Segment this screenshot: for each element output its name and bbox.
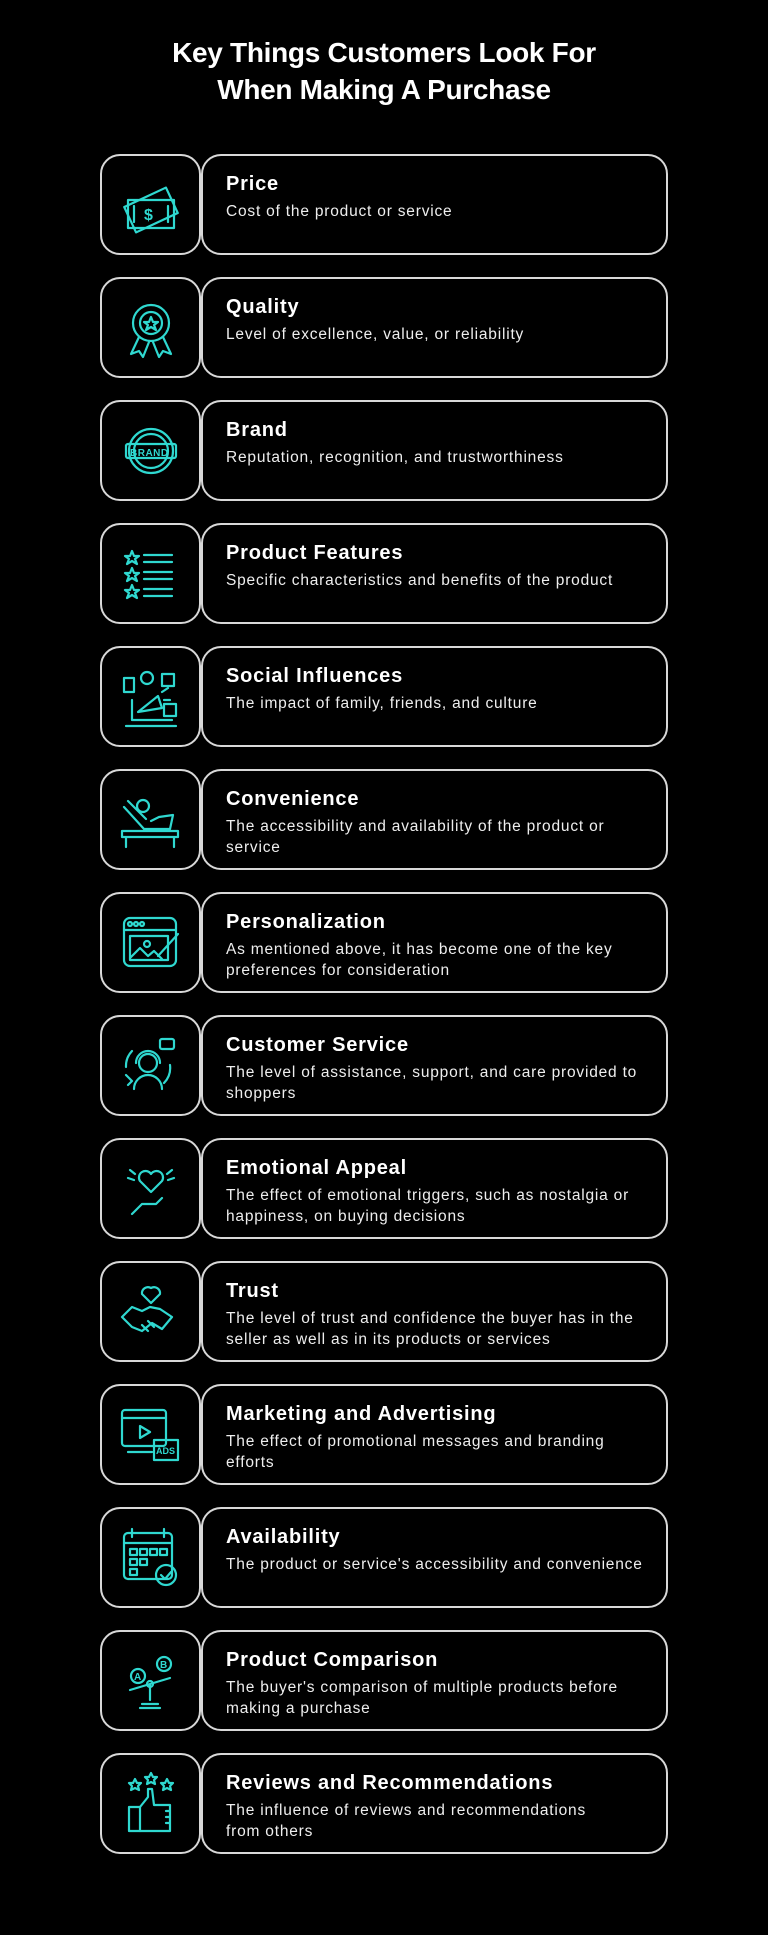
text: customer service: The level of assistance, support, and care provided to (226, 1064, 637, 1081)
icon: badge (100, 277, 201, 378)
text: comparison: The buyer's comparison of multiple products before (226, 1679, 618, 1696)
text: customer service: shoppers (226, 1085, 296, 1102)
text: marketing: Marketing and Advertising (226, 1403, 496, 1425)
row: trust (100, 1261, 668, 1362)
text: quality: Level of excellence, value, or reliability (226, 326, 524, 343)
text: marketing: efforts (226, 1454, 274, 1471)
icon: brand seal: BRAND (130, 448, 169, 459)
text: reviews: Reviews and Recommendations (226, 1772, 553, 1794)
text: product features: Product Features (226, 542, 403, 564)
text: comparison: making a purchase (226, 1700, 371, 1717)
text: emotional appeal: The effect of emotional triggers, such as nostalgia or (226, 1187, 629, 1204)
text: trust (201, 1261, 668, 1362)
icon: handshake (100, 1261, 201, 1362)
title: When Making A Purchase (217, 74, 551, 105)
text: product features (201, 523, 668, 624)
text: customer service (201, 1015, 668, 1116)
text: convenience: service (226, 839, 281, 856)
text: reviews (201, 1753, 668, 1854)
icon: thumbs up stars (100, 1753, 201, 1854)
text: price: Cost of the product or service (226, 203, 452, 220)
icon: lounge chair (100, 769, 201, 870)
row: quality (100, 277, 668, 378)
text: reviews: The influence of reviews and recommendations (226, 1802, 586, 1819)
row: personalization (100, 892, 668, 993)
text: availability: Availability (226, 1526, 340, 1548)
row: customer service (100, 1015, 668, 1116)
row: reviews (100, 1753, 668, 1854)
icon: calendar check (100, 1507, 201, 1608)
text: convenience: The accessibility and availability of the product or (226, 818, 604, 835)
text: personalization (201, 892, 668, 993)
title (172, 37, 596, 105)
icon: ads screen: ADS (156, 1446, 175, 1456)
row: comparison (100, 1630, 668, 1731)
text: reviews: from others (226, 1823, 313, 1840)
icon: ads screen (100, 1384, 201, 1485)
text: trust: seller as well as in its products or services (226, 1331, 551, 1348)
icon: scale A B (100, 1630, 201, 1731)
text: personalization: As mentioned above, it has become one of the key (226, 941, 613, 958)
text: trust: Trust (226, 1280, 279, 1302)
text: social influences (201, 646, 668, 747)
text: customer service: Customer Service (226, 1034, 409, 1056)
icon: heart in hand (100, 1138, 201, 1239)
text: brand (201, 400, 668, 501)
text: social influences: Social Influences (226, 665, 403, 687)
text: price: Price (226, 173, 279, 195)
text: availability (201, 1507, 668, 1608)
icon: money (100, 154, 201, 255)
text: product features: Specific characteristics and benefits of the product (226, 572, 613, 589)
text: convenience (201, 769, 668, 870)
text: quality (201, 277, 668, 378)
icon: support agent (100, 1015, 201, 1116)
row: emotional appeal (100, 1138, 668, 1239)
icon: money: $ (144, 207, 153, 224)
icon: star list (100, 523, 201, 624)
icon: brand seal (100, 400, 201, 501)
icon: scale A B: A (134, 1672, 141, 1683)
text: brand: Brand (226, 419, 288, 441)
row: marketing (100, 1384, 668, 1485)
text: emotional appeal: Emotional Appeal (226, 1157, 407, 1179)
icon: megaphone (100, 646, 201, 747)
text: price (201, 154, 668, 255)
row: social influences (100, 646, 668, 747)
icon: image editor (100, 892, 201, 993)
row: product features (100, 523, 668, 624)
row: availability (100, 1507, 668, 1608)
text: quality: Quality (226, 296, 299, 318)
text: trust: The level of trust and confidence the buyer has in the (226, 1310, 634, 1327)
row: convenience (100, 769, 668, 870)
row: brand (100, 400, 668, 501)
text: personalization: Personalization (226, 911, 386, 933)
text: marketing (201, 1384, 668, 1485)
text: brand: Reputation, recognition, and trustworthiness (226, 449, 564, 466)
text: marketing: The effect of promotional messages and branding (226, 1433, 605, 1450)
text: emotional appeal (201, 1138, 668, 1239)
row: price (100, 154, 668, 255)
text: comparison (201, 1630, 668, 1731)
icon: scale A B: B (160, 1660, 167, 1671)
title: Key Things Customers Look For (172, 37, 596, 68)
text: convenience: Convenience (226, 788, 359, 810)
text: availability: The product or service's accessibility and convenience (226, 1556, 643, 1573)
text: comparison: Product Comparison (226, 1649, 438, 1671)
text: social influences: The impact of family, friends, and culture (226, 695, 538, 712)
text: personalization: preferences for consideration (226, 962, 450, 979)
text: emotional appeal: happiness, on buying decisions (226, 1208, 465, 1225)
